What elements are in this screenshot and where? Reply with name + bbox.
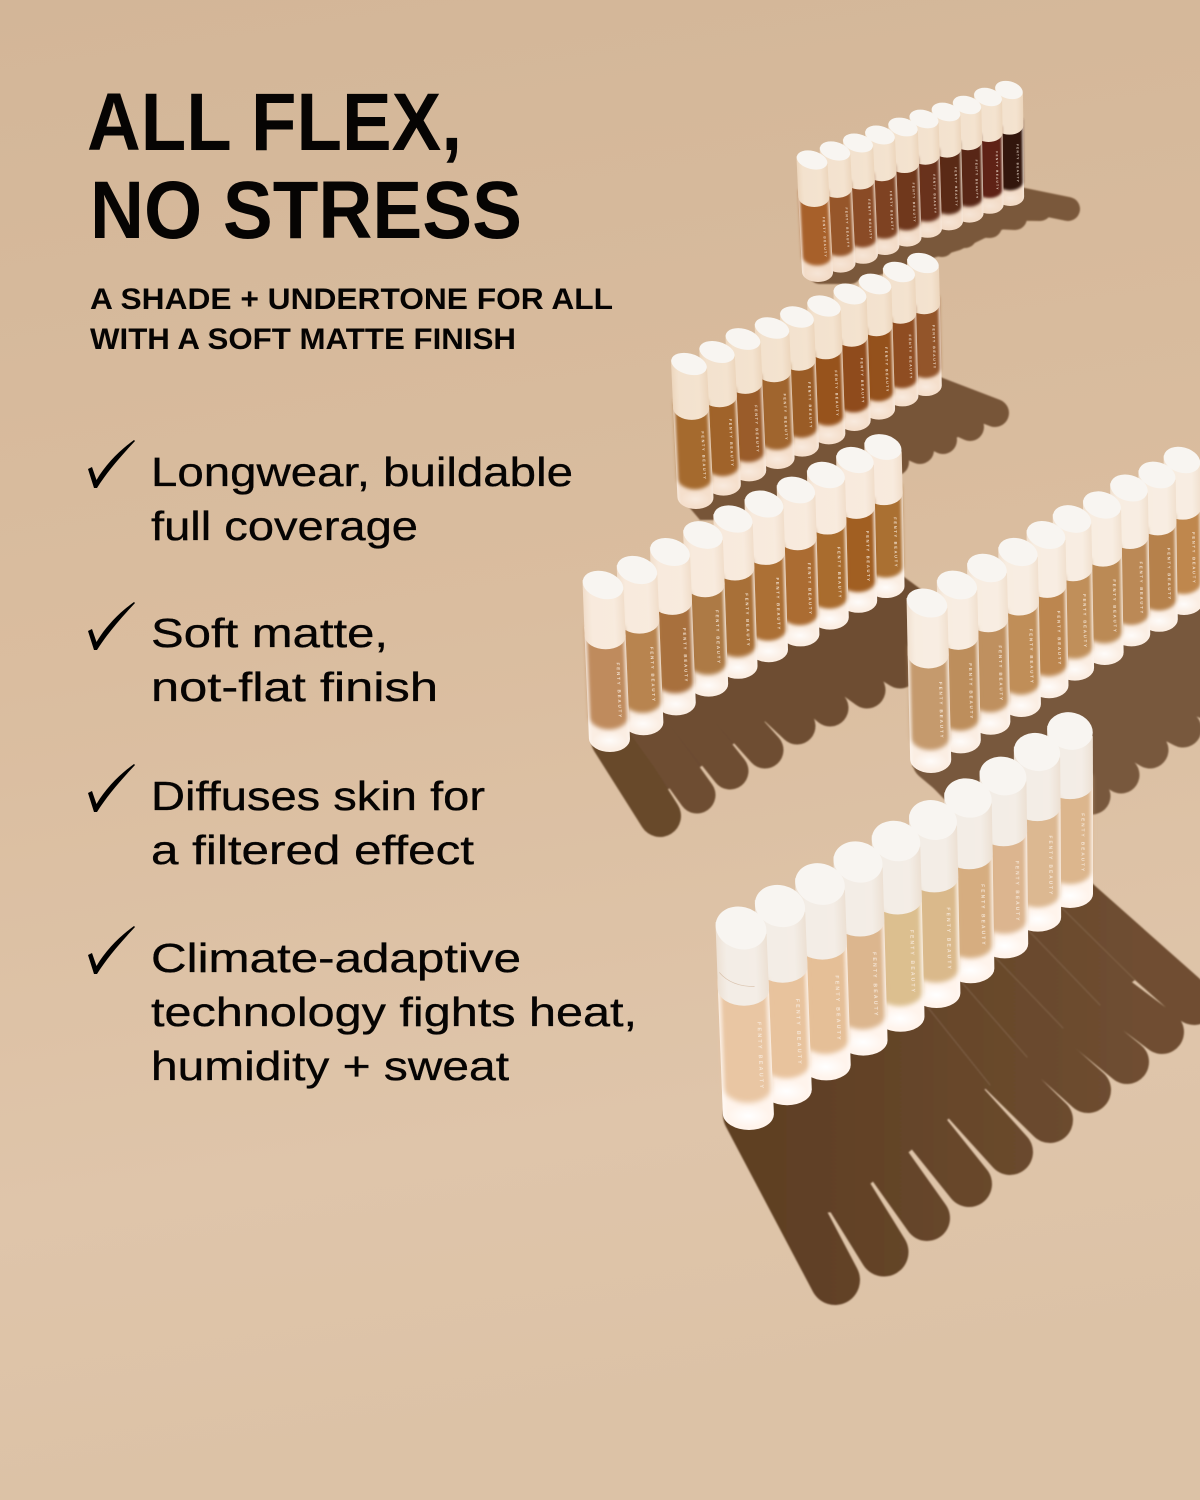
benefit text: Soft matte, xyxy=(151,610,388,656)
bottle row 5: lightest shades: FENTY BEAUTY xyxy=(755,1022,764,1090)
shadow: row 3 xyxy=(594,588,945,816)
subtitle xyxy=(90,283,613,356)
bottle row 1: deepest shades: FENTY BEAUTY xyxy=(954,167,958,207)
bottle row 2: deep tan shades: FENTY BEAUTY xyxy=(884,347,889,393)
bottle row 2: deep tan shades xyxy=(668,250,944,509)
icon: check mark xyxy=(88,440,135,488)
icon: check mark xyxy=(88,926,135,974)
bottle row 3: medium shades: FENTY BEAUTY xyxy=(893,517,899,568)
title: ALL FLEX, xyxy=(87,77,462,168)
bottle row 1: deepest shades: FENTY BEAUTY xyxy=(889,191,894,231)
benefit text xyxy=(151,773,485,873)
bottle row 2: deep tan shades: FENTY BEAUTY xyxy=(807,382,813,429)
bottle row 5: lightest shades: FENTY BEAUTY xyxy=(908,930,916,994)
bottle row 5: lightest shades: FENTY BEAUTY xyxy=(945,907,952,971)
bottle row 1: deepest shades: FENTY BEAUTY xyxy=(974,160,979,199)
bottle row 1: deepest shades: FENTY BEAUTY xyxy=(822,217,828,258)
subtitle: A SHADE + UNDERTONE FOR ALL xyxy=(90,283,613,316)
bottle row 5: lightest shades: FENTY BEAUTY xyxy=(833,975,842,1042)
bottle row 5: lightest shades: FENTY BEAUTY xyxy=(871,952,879,1018)
bottle row 2: deep tan shades: FENTY BEAUTY xyxy=(859,358,865,404)
bottle row 4: light-medium shades: FENTY BEAUTY xyxy=(1166,548,1172,601)
bottle row 4: light-medium shades: FENTY BEAUTY xyxy=(998,646,1004,702)
shadow: row 4 xyxy=(912,600,1200,845)
bottle row 3: medium shades xyxy=(579,430,907,752)
bottle row 3: medium shades: FENTY BEAUTY xyxy=(865,531,871,583)
bottle row 3: medium shades: FENTY BEAUTY xyxy=(616,663,623,719)
benefit text: technology fights heat, xyxy=(151,989,637,1035)
benefit text xyxy=(151,449,573,549)
benefit text: Longwear, buildable xyxy=(151,449,573,495)
bottle row 1: deepest shades: FENTY BEAUTY xyxy=(867,199,873,240)
bottle row 4: light-medium shades: FENTY BEAUTY xyxy=(1028,629,1035,685)
bottle row 4: light-medium shades: FENTY BEAUTY xyxy=(1191,532,1197,585)
bottle row 1: deepest shades: FENTY BEAUTY xyxy=(911,183,917,223)
bottle row 3: medium shades: FENTY BEAUTY xyxy=(775,578,782,631)
bottle row 5: lightest shades: FENTY BEAUTY xyxy=(1079,813,1086,873)
bottle row 2: deep tan shades: FENTY BEAUTY xyxy=(931,325,936,370)
bottle row 3: medium shades: FENTY BEAUTY xyxy=(682,628,689,683)
bottle row 5: lightest shades: FENTY BEAUTY xyxy=(1047,836,1053,896)
title xyxy=(87,77,522,256)
benefit text: Diffuses skin for xyxy=(151,773,485,819)
benefit: longwear coverage xyxy=(88,440,573,549)
bottle row 3: medium shades: FENTY BEAUTY xyxy=(744,593,751,647)
bottle row 2: deep tan shades: FENTY BEAUTY xyxy=(754,405,760,453)
icon: check mark xyxy=(88,602,135,650)
shadow: row 2 xyxy=(683,380,1000,520)
shadow: row 5 xyxy=(725,880,1194,1280)
benefit: climate-adaptive technology xyxy=(88,926,637,1089)
bottle row 1: deepest shades xyxy=(794,78,1026,282)
bottle row 2: deep tan shades: FENTY BEAUTY xyxy=(908,334,913,380)
bottle row 2: deep tan shades: FENTY BEAUTY xyxy=(700,431,707,480)
benefit: soft matte finish xyxy=(88,602,438,710)
bottle row 2: deep tan shades: FENTY BEAUTY xyxy=(834,370,839,417)
bottle row 1: deepest shades: FENTY BEAUTY xyxy=(1016,144,1020,183)
benefit text: full coverage xyxy=(151,503,418,549)
shadow: row 1 xyxy=(815,195,1068,284)
bottle row 4: light-medium shades: FENTY BEAUTY xyxy=(1139,562,1144,615)
benefit text: not-flat finish xyxy=(151,664,438,710)
bottle row 4: light-medium shades: FENTY BEAUTY xyxy=(1112,579,1118,634)
bottle row 2: deep tan shades: FENTY BEAUTY xyxy=(782,394,788,441)
bottle row 3: medium shades: FENTY BEAUTY xyxy=(836,547,843,599)
bottle row 1: deepest shades: FENTY BEAUTY xyxy=(995,151,999,191)
bottle row 3: medium shades: FENTY BEAUTY xyxy=(649,647,656,703)
benefit text: Climate-adaptive xyxy=(151,935,521,981)
icon: check mark xyxy=(88,764,135,812)
bottle row 5: lightest shades: FENTY BEAUTY xyxy=(1014,861,1020,923)
bottle row 2: deep tan shades: FENTY BEAUTY xyxy=(728,419,734,467)
benefit text: a filtered effect xyxy=(151,827,475,873)
benefit text xyxy=(151,610,438,710)
title: NO STRESS xyxy=(90,165,522,256)
benefit text xyxy=(151,935,637,1089)
bottle row 1: deepest shades: FENTY BEAUTY xyxy=(844,208,850,249)
benefit text: humidity + sweat xyxy=(151,1043,510,1089)
bottle row 3: medium shades: FENTY BEAUTY xyxy=(715,610,721,665)
bottle row 4: light-medium shades: FENTY BEAUTY xyxy=(968,663,974,720)
benefit: diffuses skin xyxy=(88,764,485,873)
bottle row 3: medium shades: FENTY BEAUTY xyxy=(807,563,813,616)
bottle row 4: light-medium shades xyxy=(903,443,1200,773)
subtitle: WITH A SOFT MATTE FINISH xyxy=(90,323,516,356)
bottle row 4: light-medium shades: FENTY BEAUTY xyxy=(1082,594,1088,649)
bottle row 4: light-medium shades: FENTY BEAUTY xyxy=(1056,611,1062,666)
bottle row 1: deepest shades: FENTY BEAUTY xyxy=(932,174,937,214)
bottle row 5: lightest shades: FENTY BEAUTY xyxy=(794,999,802,1066)
bottle row 4: light-medium shades: FENTY BEAUTY xyxy=(938,682,944,740)
bottle row 5: lightest shades xyxy=(710,708,1097,1130)
bottle row 5: lightest shades: FENTY BEAUTY xyxy=(979,884,986,947)
